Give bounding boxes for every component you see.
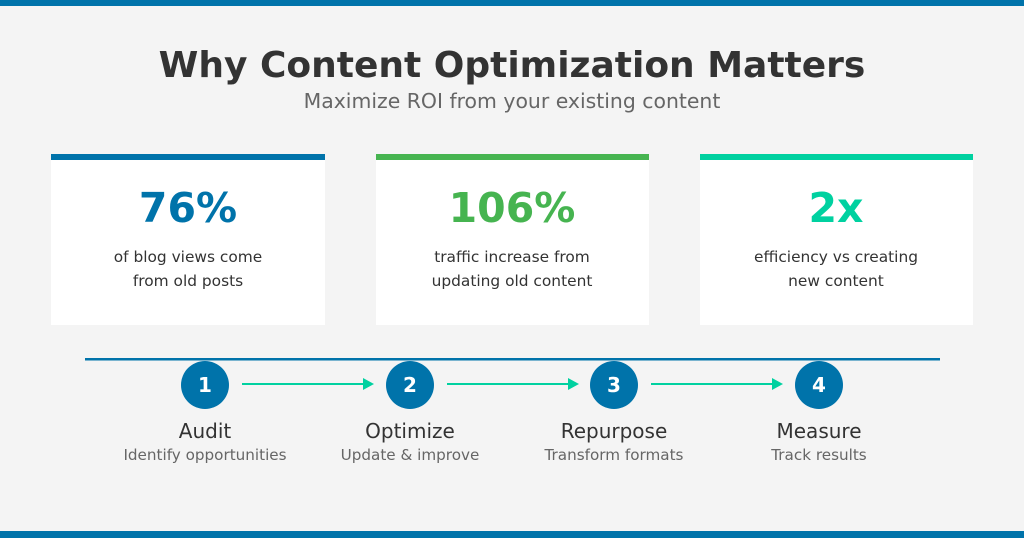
- step 1: Audit: Identify opportunities: [123, 446, 287, 464]
- step 4: Measure: [770, 361, 867, 464]
- panel: stat 76%: 76%: [139, 184, 237, 232]
- panel: stat 106%: [376, 154, 649, 325]
- arrow 3 to 4: [651, 378, 783, 390]
- step 3: Repurpose: Transform formats: [544, 446, 684, 464]
- step 2: Optimize: Update & improve: [341, 446, 479, 464]
- step 3: Repurpose: 3: [607, 373, 621, 397]
- panel: stat 106%: 106%: [449, 184, 575, 232]
- step 1: Audit: 1: [198, 373, 212, 397]
- step 1: Audit: [123, 361, 287, 464]
- panel: stat 2x: efficiency vs creating: [754, 248, 918, 266]
- title: Why Content Optimization Matters: [159, 45, 865, 86]
- panel: stat 76%: [51, 154, 325, 325]
- step 2: Optimize: [341, 361, 479, 464]
- panel: stat 76%: of blog views come: [114, 248, 262, 266]
- arrow 1 to 2: [242, 378, 374, 390]
- step 3: Repurpose: Repurpose: [561, 419, 667, 443]
- step 3: Repurpose: [544, 361, 684, 464]
- subtitle: Maximize ROI from your existing content: [304, 89, 720, 113]
- step 4: Measure: 4: [812, 373, 826, 397]
- arrow 2 to 3: [447, 378, 579, 390]
- step 2: Optimize: 2: [403, 373, 417, 397]
- step 4: Measure: Measure: [776, 419, 862, 443]
- panel: stat 76%: from old posts: [133, 272, 243, 290]
- panel: stat 106%: traffic increase from: [434, 248, 590, 266]
- panel: stat 2x: 2x: [809, 184, 863, 232]
- panel: stat 2x: [700, 154, 973, 325]
- panel: stat 2x: new content: [788, 272, 884, 290]
- step 1: Audit: Audit: [179, 419, 231, 443]
- panel: stat 106%: updating old content: [432, 272, 592, 290]
- step 4: Measure: Track results: [770, 446, 867, 464]
- step 2: Optimize: Optimize: [365, 419, 455, 443]
